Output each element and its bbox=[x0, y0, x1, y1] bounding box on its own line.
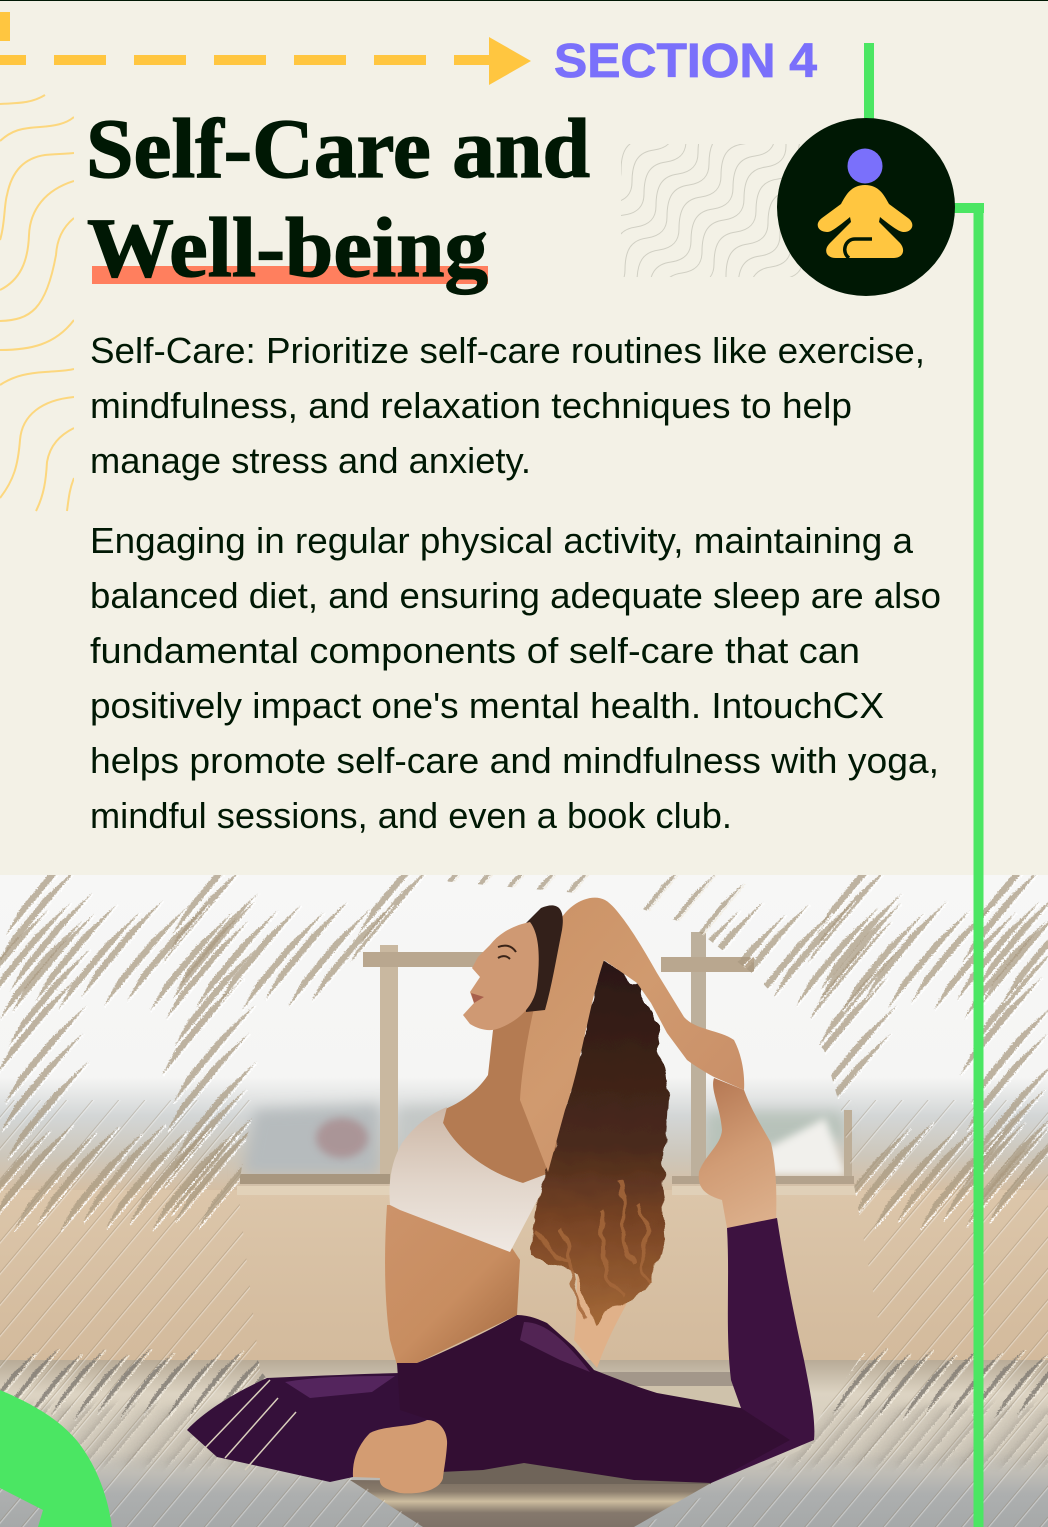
paragraph two: fundamental components of self-care that can bbox=[90, 630, 860, 671]
paragraph one: mindfulness, and relaxation techniques to help bbox=[90, 385, 852, 426]
paragraph two: helps promote self-care and mindfulness with yoga, bbox=[90, 740, 939, 781]
brush streaks on window bbox=[0, 837, 1048, 1232]
head hair bbox=[524, 905, 563, 1012]
icon leg fold bbox=[845, 239, 872, 258]
leggings highlight lower bbox=[285, 1376, 395, 1398]
leg streak lines bbox=[205, 1380, 296, 1470]
room background bbox=[0, 875, 1048, 1527]
paragraph two: mindful sessions, and even a book club. bbox=[90, 795, 732, 836]
hair bbox=[530, 960, 668, 1325]
photo: woman doing a yoga pose by a window bbox=[0, 837, 1048, 1527]
floor streak texture bbox=[30, 1402, 1048, 1468]
icon: meditating person in dark circle bbox=[777, 118, 955, 296]
paragraph two: balanced diet, and ensuring adequate sleep are also bbox=[90, 575, 941, 616]
leggings highlight bbox=[520, 1322, 590, 1372]
face bbox=[463, 922, 539, 1030]
window frames bbox=[237, 932, 856, 1195]
hair curls bbox=[535, 1180, 650, 1320]
neck and chest bbox=[443, 1010, 558, 1183]
raised arm bbox=[520, 898, 744, 1172]
heading bbox=[86, 102, 590, 295]
brush streaks on floor edge bbox=[0, 1348, 1048, 1421]
green connector line bbox=[864, 43, 984, 1527]
dashed arrow bbox=[0, 12, 531, 85]
icon head bbox=[848, 148, 882, 184]
raised foot bbox=[699, 1078, 776, 1228]
torso bbox=[385, 1205, 520, 1365]
woman bbox=[187, 898, 814, 1493]
decorative grey wave lines bbox=[621, 144, 801, 277]
paragraph one bbox=[90, 330, 925, 481]
window view bbox=[242, 1105, 846, 1175]
paragraph one: Self-Care: Prioritize self-care routines like exercise, bbox=[90, 330, 925, 371]
leggings front leg bbox=[187, 1373, 430, 1482]
paragraph two: positively impact one's mental health. IntouchCX bbox=[90, 685, 884, 726]
heading line two: Well-being bbox=[87, 201, 488, 295]
heading underline bbox=[92, 266, 488, 284]
back arm bbox=[574, 1274, 626, 1368]
paragraph two bbox=[90, 520, 941, 836]
leggings raised leg bbox=[711, 1218, 814, 1483]
paragraph two: Engaging in regular physical activity, maintaining a bbox=[90, 520, 914, 561]
icon background circle bbox=[777, 118, 955, 296]
eyebrow and eye bbox=[498, 946, 516, 959]
heading line one: Self-Care and bbox=[86, 102, 590, 196]
top edge line bbox=[0, 0, 1048, 1]
icon body bbox=[818, 185, 912, 258]
sports bra bbox=[390, 1107, 552, 1252]
paragraph one: manage stress and anxiety. bbox=[90, 440, 531, 481]
leggings hips bbox=[397, 1315, 790, 1483]
thin diagonal streak lines bbox=[0, 1100, 1048, 1527]
lips bbox=[471, 993, 484, 1003]
decorative yellow wave lines bbox=[0, 95, 74, 511]
green corner shape bbox=[0, 1390, 112, 1527]
seated foot bbox=[353, 1420, 447, 1493]
section label: SECTION 4 bbox=[554, 35, 817, 88]
